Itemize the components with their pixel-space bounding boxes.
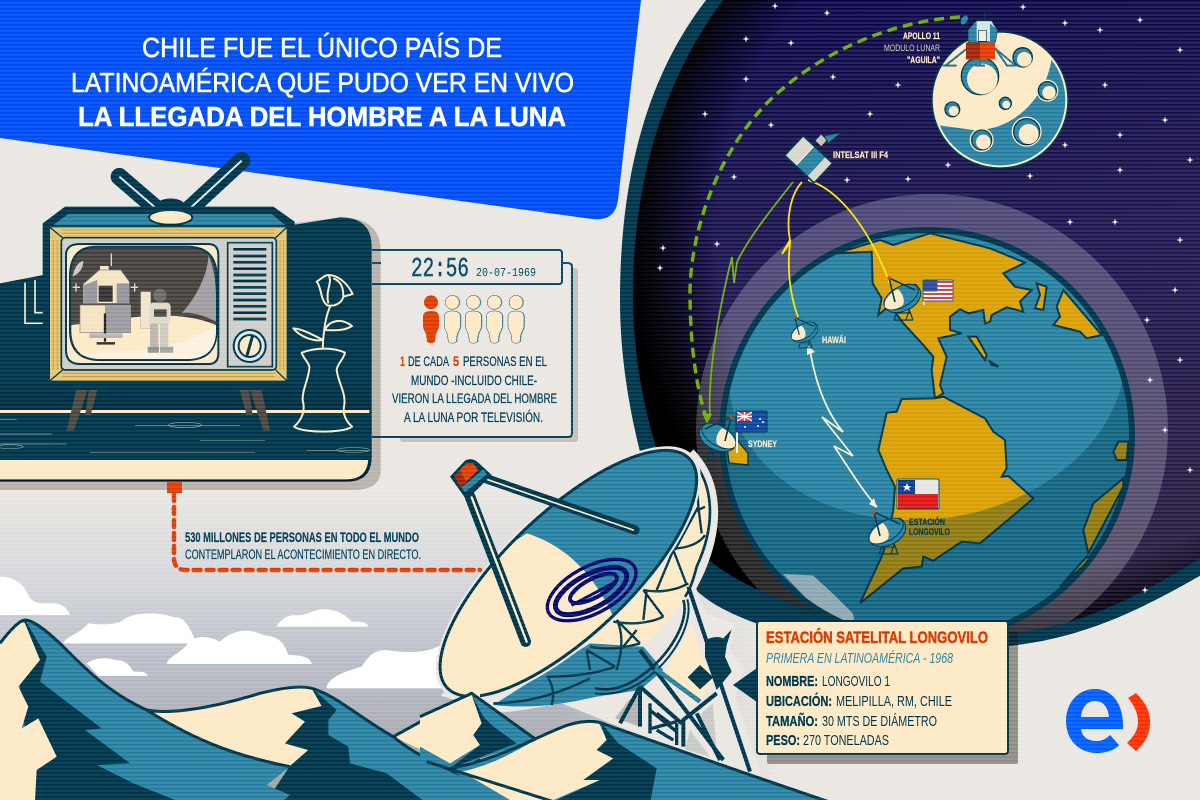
title: LA LLEGADA DEL HOMBRE A LA LUNA xyxy=(78,101,566,132)
title: LATINOAMÉRICA QUE PUDO VER EN VIVO xyxy=(71,67,574,98)
text: una de cada cinco: PERSONAS EN EL xyxy=(463,353,547,369)
clouds xyxy=(0,577,467,688)
craters xyxy=(945,48,1058,152)
label: estacion longovilo xyxy=(909,516,950,538)
card heading: ESTACIÓN SATELITAL LONGOVILO xyxy=(766,628,988,647)
text: 530 millones: 530 MILLONES DE PERSONAS EN TODO EL MUNDO xyxy=(185,529,419,545)
earth globe xyxy=(720,215,1135,645)
rose in vase xyxy=(293,275,353,432)
label: estacion longovilo: LONGOVILO xyxy=(909,527,950,538)
continent: antarctica xyxy=(783,574,854,620)
text: una de cada cinco: 1 xyxy=(400,353,405,369)
connector: dotted line xyxy=(167,482,480,570)
mountains: right xyxy=(420,693,833,800)
text: una de cada cinco: MUNDO -INCLUIDO CHILE- xyxy=(411,372,537,388)
continent: australia xyxy=(727,440,748,465)
card rows: 30 MTS DE DIÁMETRO xyxy=(822,713,937,730)
pointer to data card xyxy=(733,668,757,702)
continent: north america xyxy=(837,233,1032,398)
panel: tv room xyxy=(0,217,381,490)
label: intelsat: INTELSAT III F4 xyxy=(833,150,889,161)
continent: islands and africa xyxy=(968,283,1128,587)
dish face xyxy=(436,446,701,698)
panel: data card xyxy=(757,621,1018,764)
earth shadow xyxy=(725,382,1129,620)
dish bowl xyxy=(450,457,713,708)
tv antenna xyxy=(119,161,242,212)
text: 530 millones xyxy=(185,529,421,562)
label: apollo 11 xyxy=(884,31,941,66)
title: CHILE FUE EL ÚNICO PAÍS DE xyxy=(142,32,502,63)
label: estacion longovilo: ESTACIÓN xyxy=(909,516,945,528)
card rows: LONGOVILO 1 xyxy=(822,673,890,690)
feed arms xyxy=(470,478,635,642)
continent: south america xyxy=(860,397,1033,603)
tv dome xyxy=(149,210,192,225)
banner xyxy=(0,0,641,219)
mountains: left xyxy=(0,620,557,800)
dish: USA xyxy=(880,276,922,320)
logo: enel xyxy=(1066,689,1150,753)
sky background xyxy=(0,490,780,800)
card subtitle: PRIMERA EN LATINOAMÉRICA - 1968 xyxy=(766,650,953,667)
clock tab xyxy=(372,250,562,285)
card rows: TAMAÑO: xyxy=(766,712,818,730)
text: una de cada cinco: DE CADA xyxy=(408,353,449,369)
earth halo xyxy=(696,194,1168,666)
title xyxy=(71,32,574,132)
tv set xyxy=(43,161,295,431)
signal: yellow to USA xyxy=(808,180,890,284)
label: apollo 11: APOLLO 11 xyxy=(903,31,941,42)
moon xyxy=(931,31,1069,169)
dish: Longovilo xyxy=(865,510,907,554)
flag: Australia xyxy=(736,411,767,453)
text: una de cada cinco: VIERON LA LLEGADA DEL HOMBRE xyxy=(392,390,557,406)
clock tab: 22:56 xyxy=(411,255,469,285)
logo swirl on dish xyxy=(538,547,646,633)
card rows: UBICACIÓN: xyxy=(766,692,832,710)
dish: Hawai xyxy=(788,316,819,348)
signal: white Hawaii to Longovilo xyxy=(810,350,877,507)
signal: yellow to Hawaii xyxy=(782,182,802,317)
tower xyxy=(620,587,750,772)
text: una de cada cinco: A LA LUNA POR TELEVISIÓN. xyxy=(404,409,543,425)
signal: green xyxy=(710,182,793,417)
radio telescope xyxy=(436,446,701,698)
satellite: intelsat xyxy=(784,133,841,184)
signal: green dashed xyxy=(690,17,960,420)
clock tab: 20-07-1969 xyxy=(476,266,536,280)
lander: apollo 11 xyxy=(943,11,1018,66)
label: sydney: SYDNEY xyxy=(748,439,777,450)
text: una de cada cinco xyxy=(392,353,557,425)
tower background xyxy=(553,570,760,783)
card rows: 270 TONELADAS xyxy=(803,732,889,749)
people pictogram xyxy=(423,295,525,343)
tv screen xyxy=(66,244,218,364)
card rows: PESO: xyxy=(766,732,800,749)
card rows: MELIPILLA, RM, CHILE xyxy=(836,693,952,710)
label: hawai: HAWÁI xyxy=(822,335,846,345)
lander on screen xyxy=(73,253,151,343)
arrowhead xyxy=(702,413,712,424)
card rows xyxy=(766,673,952,749)
astronaut on screen xyxy=(148,289,173,353)
flag: Chile xyxy=(897,479,939,509)
card rows: NOMBRE: xyxy=(766,673,818,690)
text: una de cada cinco: 5 xyxy=(453,353,459,369)
flag: USA xyxy=(923,280,953,305)
feed horn xyxy=(450,459,492,500)
label: apollo 11: MODULO LUNAR xyxy=(884,43,940,54)
tv wood frame xyxy=(50,227,287,381)
panel: space xyxy=(620,0,1200,650)
text: 530 millones: CONTEMPLARON EL ACONTECIMIENTO EN DIRECTO. xyxy=(185,546,421,562)
label: apollo 11: "AGUILA" xyxy=(907,55,940,66)
tv controls xyxy=(228,243,272,367)
tv legs xyxy=(67,381,270,431)
panel: info box xyxy=(372,250,578,442)
dish: Sydney xyxy=(698,415,740,459)
